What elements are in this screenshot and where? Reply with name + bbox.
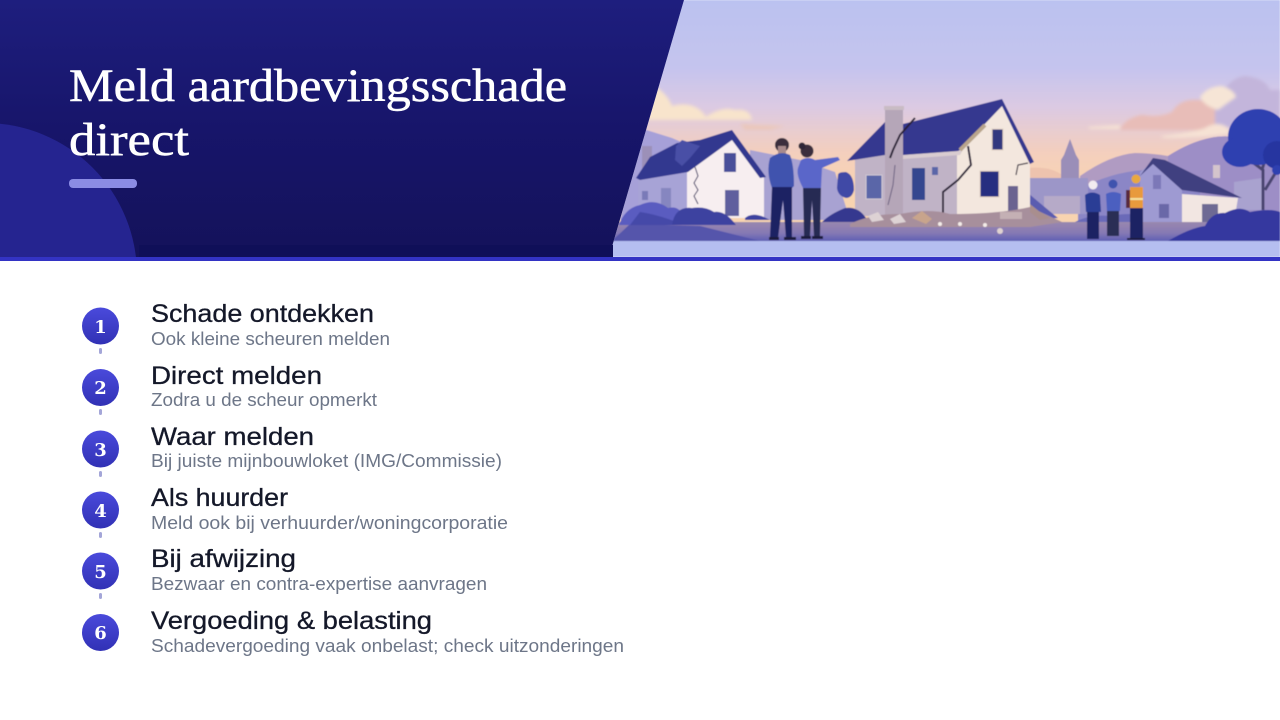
icon: foreground bushes right: [1168, 209, 1280, 241]
person: inspector in blue helmet: [1106, 180, 1121, 236]
illustration: right house: [1140, 158, 1242, 222]
step 4: Als huurder: [151, 484, 288, 512]
step 2: [82, 362, 377, 415]
step 1: Ook kleine scheuren melden: [151, 329, 390, 349]
title: direct: [69, 114, 189, 166]
step 6: [82, 607, 624, 656]
person: worker in orange vest: [1126, 174, 1145, 240]
step 5: Bezwaar en contra-expertise aanvragen: [151, 574, 487, 594]
ground: [600, 222, 1280, 241]
title: [69, 60, 567, 166]
header panel: navy background: [0, 0, 684, 257]
person: woman pointing at house: [798, 142, 840, 239]
decorative quarter circle: [0, 124, 136, 257]
step 3: Bij juiste mijnbouwloket (IMG/Commissie): [151, 451, 502, 471]
header bottom rule: [0, 257, 1280, 261]
step 3: 3: [94, 440, 107, 461]
illustration: left house with crack: [619, 130, 770, 225]
step 1: 1: [94, 317, 107, 338]
step 5: [82, 545, 487, 599]
step 4: Meld ook bij verhuurder/woningcorporatie: [151, 513, 508, 533]
step 4: 4: [94, 501, 107, 522]
illustration: main house with large cracks: [822, 99, 1034, 222]
icon: tree: [1222, 109, 1280, 210]
person: inspector in white helmet: [1085, 180, 1101, 239]
step 6: Vergoeding & belasting: [151, 607, 432, 635]
step 4: [82, 484, 508, 538]
bottom shade: [139, 245, 613, 257]
step 2: Zodra u de scheur opmerkt: [151, 390, 377, 410]
step 6: 6: [94, 623, 107, 644]
step 5: 5: [94, 562, 107, 583]
step 2: Direct melden: [151, 362, 322, 390]
step list: [82, 300, 624, 656]
illustration: earthquake-damaged village scene: [600, 0, 1280, 257]
step 2: 2: [94, 378, 107, 399]
illustration: rubble at foot of house: [850, 204, 1062, 234]
icon: distant town with church tower: [1028, 139, 1262, 224]
title: Meld aardbevingsschade: [69, 60, 567, 112]
title accent bar: [69, 179, 137, 188]
icon: distant hills: [620, 128, 1280, 225]
step 1: Schade ontdekken: [151, 300, 374, 328]
step 5: Bij afwijzing: [151, 545, 296, 573]
person: man looking at damage: [768, 138, 796, 240]
icon: clouds: [640, 76, 1280, 138]
step 6: Schadevergoeding vaak onbelast; check uitzonderingen: [151, 636, 624, 656]
step 1: [82, 300, 390, 354]
step 3: [82, 423, 502, 477]
step 3: Waar melden: [151, 423, 314, 451]
